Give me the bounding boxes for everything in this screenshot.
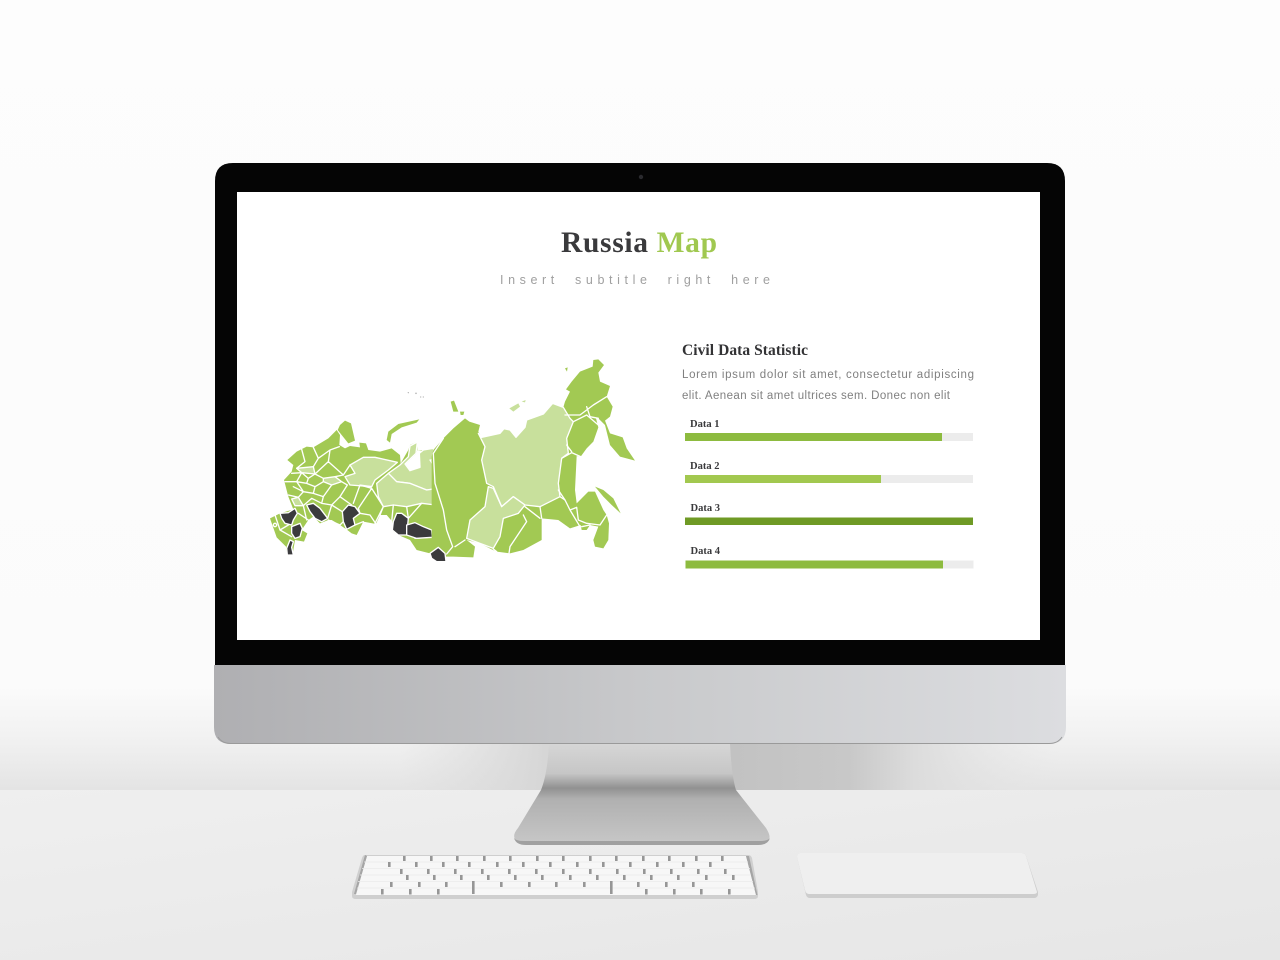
Sakhalin	[595, 487, 621, 513]
key gaps	[381, 856, 735, 894]
key row seams	[357, 862, 755, 888]
webcam	[639, 175, 643, 179]
Arctic islands	[451, 367, 568, 415]
panel: civil data statistic	[682, 342, 974, 568]
Novaya Zemlya	[387, 419, 419, 443]
subtitle: Insert subtitle right here	[500, 273, 770, 287]
chin rim	[218, 737, 1062, 744]
east Russia base	[432, 359, 635, 558]
trackpad	[797, 853, 1038, 898]
Yakutia	[478, 403, 573, 507]
title: Russia Map	[561, 227, 717, 259]
dark regions west	[280, 503, 432, 555]
Dark south region	[430, 547, 446, 562]
bar: data 3	[685, 503, 973, 525]
light regions west	[292, 442, 438, 507]
monitor body	[214, 163, 1066, 744]
bar: data 2	[685, 461, 973, 483]
bar: data 3: Data 3	[690, 503, 720, 514]
monitor bezel	[215, 163, 1065, 665]
bar: data 4	[686, 546, 974, 568]
body text: Lorem ipsum dolor sit amet, consectetur adipiscing	[682, 369, 974, 381]
slide screen	[237, 192, 1040, 640]
desk surface	[0, 790, 1280, 960]
polar island dots	[408, 392, 424, 398]
Russia map	[270, 359, 635, 562]
bar: data 2: Data 2	[690, 461, 719, 472]
map: eastern regions	[430, 359, 635, 562]
European Russia base	[270, 430, 450, 557]
bar: data 4: Data 4	[690, 546, 721, 557]
monitor shadow on wall	[400, 744, 1060, 790]
panel heading: Civil Data Statistic	[682, 342, 808, 359]
body text: elit. Aenean sit amet ultrices sem. Donec non elit	[682, 390, 951, 402]
keyboard side edges	[354, 855, 758, 895]
keyboard	[352, 855, 758, 899]
Gulf of Ob	[406, 450, 423, 471]
bar: data 1: Data 1	[690, 419, 719, 430]
bar: data 1	[685, 419, 973, 441]
monitor chin	[214, 665, 1066, 744]
body text	[682, 369, 974, 402]
Irkutsk	[467, 487, 525, 548]
region borders east	[433, 397, 607, 554]
region borders west	[273, 447, 445, 550]
monitor stand	[514, 743, 770, 845]
map: western regions	[270, 392, 450, 557]
Kola peninsula	[338, 421, 355, 443]
